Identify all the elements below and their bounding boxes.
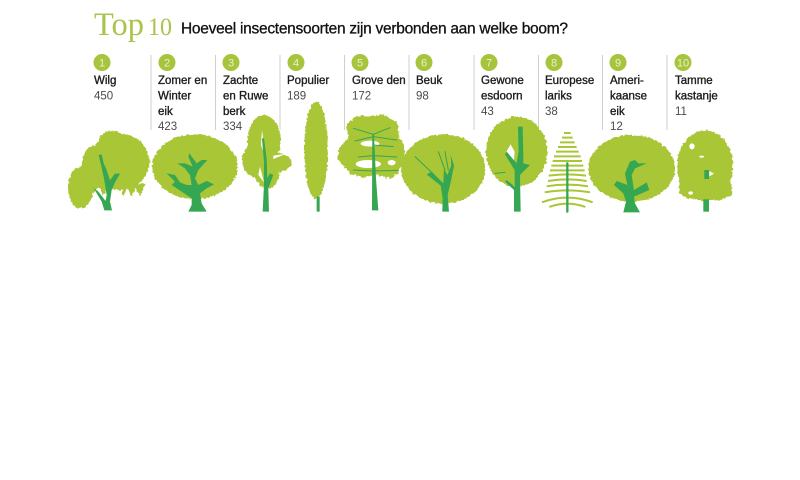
tree: maple [486,117,547,212]
entry 10: Tamme kastanje [674,54,718,118]
entry 8: Europese lariks: 38 [545,106,558,118]
entry 3: Zachte en Ruwe berk: 334 [223,121,243,133]
entry 4: Populier: 4 [293,58,299,70]
entry 2: Zomer en Winter eik: 423 [158,121,177,133]
tree: Scots pine [340,117,403,210]
entry 9: Amerikaanse eik: Ameri- [610,75,644,87]
entry 7: Gewone esdoorn: Gewone [481,75,524,87]
entry 10: Tamme kastanje: 11 [675,106,687,118]
entry 2: Zomer en Winter eik [158,54,207,133]
entry 10: Tamme kastanje: Tamme [675,75,713,87]
entry 3: Zachte en Ruwe berk: en Ruwe [223,90,268,102]
entry 3: Zachte en Ruwe berk: berk [223,106,246,118]
entry 10: Tamme kastanje: kastanje [675,90,718,102]
title: Top 10: 10 [148,14,172,41]
tree: beech [401,134,485,212]
tree: birch [242,115,292,212]
entry 5: Grove den: Grove den [352,75,406,87]
entry 3: Zachte en Ruwe berk: Zachte [223,75,258,87]
entry 1: Wilg [94,54,116,102]
entry 2: Zomer en Winter eik: eik [158,106,173,118]
entry 6: Beuk: 98 [416,90,429,102]
entry 4: Populier: Populier [287,75,329,87]
entry 3: Zachte en Ruwe berk: 3 [228,58,234,70]
entry 7: Gewone esdoorn: esdoorn [481,90,523,102]
heading: Hoeveel insectensoorten zijn verbonden aan welke boom? [181,20,568,38]
tree: American oak [588,135,675,212]
entry 2: Zomer en Winter eik: 2 [164,58,170,70]
tree: willow [68,131,149,210]
entry 9: Amerikaanse eik: 9 [615,58,621,70]
entry 7: Gewone esdoorn: 7 [486,58,492,70]
tree: larch [542,133,593,212]
entry 5: Grove den: 172 [352,90,371,102]
entry 5: Grove den: 5 [357,58,363,70]
entry 9: Amerikaanse eik: 12 [610,121,623,133]
entry 4: Populier: 189 [287,90,306,102]
entry 3: Zachte en Ruwe berk [222,54,268,133]
entry 4: Populier [287,54,329,102]
entry 5: Grove den [352,54,406,102]
tree: oak [152,134,238,212]
entry 9: Amerikaanse eik: eik [610,106,625,118]
tree: chestnut [677,131,733,212]
entry 2: Zomer en Winter eik: Zomer en [158,75,207,87]
entry 8: Europese lariks: Europese [545,75,594,87]
entry 6: Beuk: Beuk [416,75,442,87]
entry 1: Wilg: 450 [94,90,113,102]
entry 8: Europese lariks: lariks [545,90,572,102]
entry 10: Tamme kastanje: 10 [677,58,689,70]
tree: poplar [304,101,328,212]
entry 6: Beuk [416,54,442,102]
entry 1: Wilg: Wilg [94,75,116,87]
entry 7: Gewone esdoorn [480,54,524,118]
entry 8: Europese lariks [545,54,594,118]
entry 1: Wilg: 1 [99,58,105,70]
title: Top 10: Top [94,7,144,43]
entry 7: Gewone esdoorn: 43 [481,106,494,118]
entry 9: Amerikaanse eik: kaanse [610,90,647,102]
entry 6: Beuk: 6 [421,58,427,70]
entry 8: Europese lariks: 8 [551,58,557,70]
entry 2: Zomer en Winter eik: Winter [158,90,191,102]
entry 9: Amerikaanse eik [610,54,647,133]
